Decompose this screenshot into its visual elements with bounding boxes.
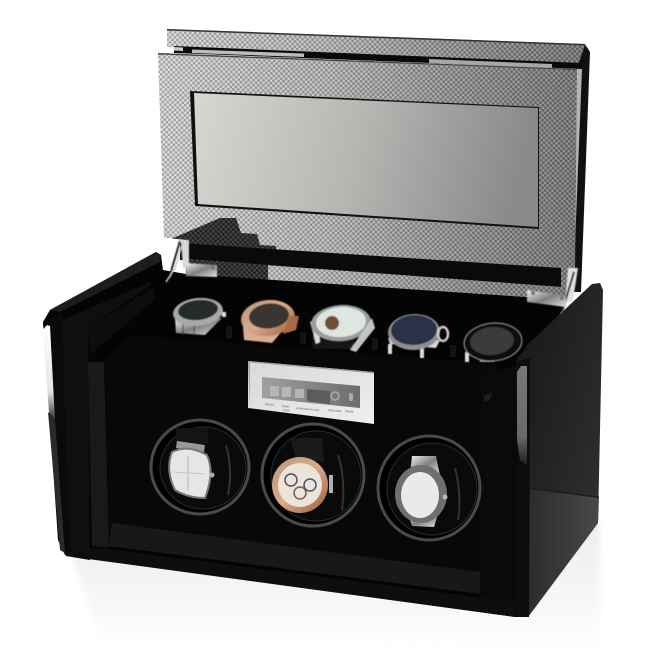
lid top edge [167, 29, 589, 66]
button labels: SELECT [265, 403, 275, 407]
watch 1 steel diver [172, 295, 226, 335]
right lid stay hinge [527, 268, 578, 312]
lcd display [262, 377, 360, 408]
bottom recess [109, 523, 480, 594]
shelf slots [130, 318, 516, 364]
left inner frame [62, 282, 154, 560]
lower carbon strip [186, 259, 562, 300]
hinge gap [174, 46, 582, 69]
velvet band [180, 243, 561, 287]
brushed plate [248, 361, 374, 424]
left side top edge [50, 252, 161, 312]
lower reflection of right panel [528, 488, 599, 617]
watch 3 white chronograph [310, 303, 375, 352]
front panel [105, 335, 496, 591]
winder right with steel watch [378, 436, 480, 540]
left front pillar [42, 312, 90, 560]
shadow on lid [172, 218, 276, 262]
display glyphs [270, 386, 353, 404]
watch 4 blue dial [387, 313, 448, 358]
box body [42, 252, 603, 617]
button labels: ROTATIONS PER DAY [296, 407, 320, 412]
winder centre with rose gold watch [262, 424, 364, 526]
floor reflection [70, 522, 600, 650]
box silhouette interior [43, 252, 566, 617]
winder left with tonneau watch [151, 420, 249, 514]
mirror [190, 91, 539, 229]
right side panel [516, 283, 603, 617]
left lid stay hinge [166, 240, 217, 282]
control panel [248, 361, 374, 424]
top hinge right [429, 59, 552, 68]
lid inner panel [158, 53, 577, 300]
button labels: DIRECTION [328, 409, 342, 413]
top hinge left [174, 47, 304, 57]
right front pillar [516, 358, 530, 617]
lid side edge [572, 45, 590, 292]
watch 5 black bezel [462, 321, 524, 363]
button labels: STOP [283, 409, 290, 413]
lid [158, 29, 590, 300]
right inner strip [480, 366, 516, 610]
button labels: START [282, 405, 290, 409]
watch 2 rose gold [239, 297, 299, 343]
button labels [265, 403, 355, 414]
button labels: ON/OFF [345, 410, 355, 414]
top row of watches [172, 295, 524, 363]
